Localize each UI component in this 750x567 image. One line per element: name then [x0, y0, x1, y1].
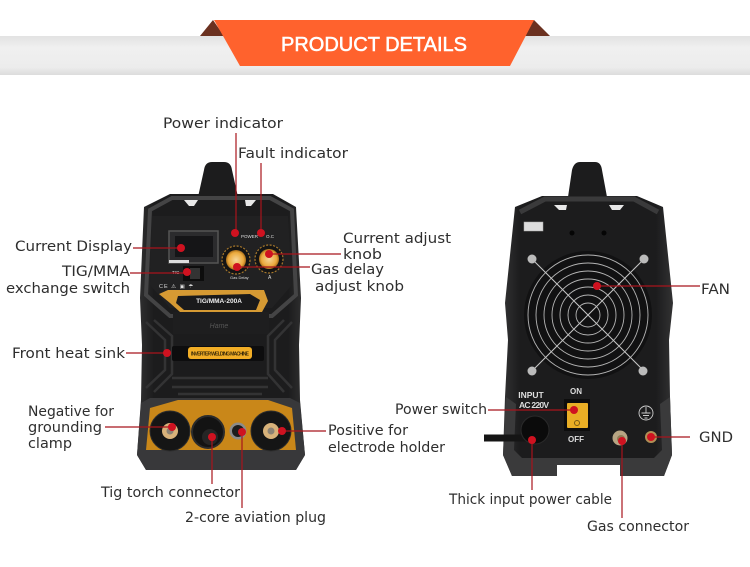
- callout: gas delay adjust knob: Gas delay: [311, 262, 384, 278]
- callout: negative: grounding: [28, 420, 102, 436]
- callout: fan: FAN: [701, 282, 730, 298]
- current knob: [255, 245, 283, 281]
- current knob: A: [268, 275, 272, 281]
- callout: fault indicator: Fault indicator: [238, 146, 348, 162]
- front body: [137, 194, 305, 470]
- callout: current adjust knob: Current adjust: [343, 231, 451, 247]
- callout: exchange switch: [6, 264, 191, 297]
- callout: power indicator: Power indicator: [163, 116, 283, 132]
- vent holes: [570, 230, 606, 236]
- callout: gas delay adjust knob: [233, 262, 404, 295]
- callout: input power cable: [448, 436, 612, 508]
- gold handle strip: [181, 219, 256, 224]
- heat sink vents: [146, 320, 292, 394]
- callout: gnd: [647, 430, 733, 446]
- callout: tig torch connector: [100, 433, 240, 501]
- rear body: [503, 196, 673, 476]
- callout: fan: [593, 282, 730, 298]
- indicator lamps text: [241, 234, 275, 239]
- callout: gas connector: [587, 437, 689, 535]
- indicator lamps text: POWER: [241, 234, 259, 239]
- rocker switch: [172, 266, 204, 281]
- banner: product details: [0, 20, 750, 75]
- gas connector: [612, 430, 628, 446]
- power cable and gland: [484, 416, 549, 444]
- front frame top: [146, 198, 296, 316]
- callout: gas connector: Gas connector: [587, 519, 689, 535]
- front handle: [198, 162, 238, 197]
- power switch: [564, 399, 590, 431]
- rear handle: [568, 162, 607, 197]
- callout: aviation plug: [185, 428, 326, 526]
- callout: exchange switch: TIG/MMA: [61, 264, 130, 280]
- callout: front heat sink: [12, 346, 171, 362]
- brand plate: Hame: [210, 323, 228, 330]
- rear top frame: [520, 199, 658, 212]
- nameplate: [172, 346, 264, 361]
- input text: INPUT: [518, 390, 545, 400]
- tig torch socket: [192, 416, 224, 448]
- certification marks: CE ⚠ ▣ ☂: [159, 283, 194, 290]
- gold connector panel: [146, 400, 296, 450]
- gold model plate: [159, 290, 268, 312]
- negative socket: [150, 411, 190, 451]
- ground symbol: [639, 406, 653, 420]
- callout: power switch: [395, 402, 578, 418]
- gold model plate: TIG/MMA-200A: [196, 298, 242, 305]
- gas delay knob: Gas Delay: [230, 275, 249, 280]
- callout: negative: [28, 404, 176, 452]
- callout: current display: [15, 239, 185, 255]
- gas delay knob: [222, 246, 250, 280]
- callout: negative: clamp: [28, 436, 72, 452]
- ground terminal: [645, 431, 657, 443]
- callout: input power cable: Thick input power cable: [448, 492, 612, 508]
- fan: [524, 251, 652, 379]
- indicator lamps text: O.C: [266, 234, 275, 239]
- callout: current adjust knob: [265, 231, 451, 263]
- current display: [169, 231, 218, 263]
- on label: ON: [570, 387, 582, 396]
- callout: aviation plug: 2-core aviation plug: [185, 510, 326, 526]
- off label: OFF: [568, 435, 584, 444]
- nameplate: INVERTER WELDING MACHINE: [191, 352, 250, 358]
- callout: gnd: GND: [699, 430, 733, 446]
- aviation plug: [230, 422, 246, 440]
- front bottom bezel: [137, 398, 305, 470]
- callout: negative: Negative for: [28, 404, 114, 420]
- callout: gas delay adjust knob: adjust knob: [315, 279, 404, 295]
- rating sticker: [524, 222, 543, 231]
- callout: tig torch connector: Tig torch connector: [100, 485, 240, 501]
- positive socket: [251, 411, 291, 451]
- voltage text: AC 220V: [519, 400, 549, 410]
- callout: power indicator: [163, 116, 283, 237]
- rear view of welding machine: [484, 162, 673, 476]
- callout: positive: electrode holder: [328, 440, 445, 456]
- callout: exchange switch: exchange switch: [6, 281, 130, 297]
- callout: current display: Current Display: [15, 239, 132, 255]
- callout: fault indicator: [238, 146, 348, 237]
- rear bottom bezel: [503, 397, 672, 476]
- brand plate: [173, 312, 269, 334]
- callout: front heat sink: Front heat sink: [12, 346, 126, 362]
- callout: current adjust knob: knob: [343, 247, 382, 263]
- callout: power switch: Power switch: [395, 402, 487, 418]
- rocker switch: TIG: [172, 270, 180, 275]
- banner: product details: PRODUCT DETAILS: [281, 33, 467, 56]
- control panel: [150, 216, 292, 308]
- callout: positive: Positive for: [328, 423, 408, 439]
- front view of welding machine: [137, 162, 305, 470]
- callout: positive: [278, 423, 445, 456]
